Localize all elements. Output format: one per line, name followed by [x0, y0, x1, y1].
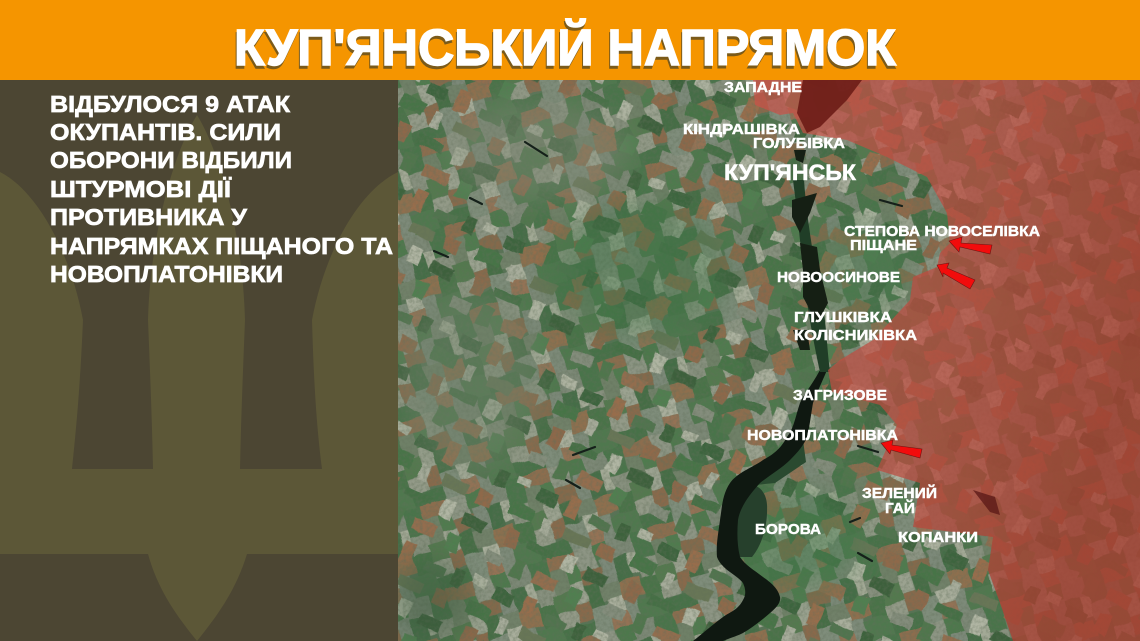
forest beside reservoir	[737, 484, 767, 557]
map labels: КІНДРАШІВКА	[683, 121, 800, 138]
map labels: ЗЕЛЕНИЙ	[862, 484, 937, 502]
map labels: ЗАГРИЗОВЕ	[793, 387, 887, 404]
panel: text background	[0, 80, 398, 641]
map labels: ГОЛУБІВКА	[753, 135, 845, 152]
gullies	[434, 142, 902, 561]
map labels: ГАЙ	[885, 499, 915, 517]
map labels	[683, 79, 1040, 546]
title: КУП'ЯНСЬКИЙ НАПРЯМОК	[234, 18, 897, 76]
map labels: ГЛУШКІВКА	[794, 309, 892, 326]
dark forest patches	[792, 150, 828, 350]
map labels: КУП'ЯНСЬК	[724, 160, 857, 185]
text block: attacks summary: ВІДБУЛОСЯ 9 АТАК	[50, 91, 291, 117]
occupied territory overlay	[753, 80, 1140, 641]
arrow: towards Pishchane	[937, 263, 975, 289]
map labels: ПІЩАНЕ	[850, 237, 917, 254]
map labels: КОПАНКИ	[898, 529, 978, 546]
trident emblem	[0, 115, 398, 641]
map labels: НОВОПЛАТОНІВКА	[747, 427, 898, 444]
map labels: КОЛІСНИКІВКА	[794, 327, 917, 344]
map labels: ЗАПАДНЕ	[724, 79, 802, 96]
text block: attacks summary: ШТУРМОВІ ДІЇ	[50, 176, 232, 202]
satellite map	[380, 60, 1140, 641]
text block: attacks summary: НАПРЯМКАХ ПІЩАНОГО ТА	[50, 233, 393, 259]
header bar	[0, 0, 1140, 80]
text block: attacks summary: ПРОТИВНИКА У	[50, 204, 247, 230]
dark red zone	[797, 80, 862, 133]
map labels: БОРОВА	[755, 521, 821, 538]
broad colour variation	[390, 100, 910, 640]
arrow: towards Novoplatonivka	[881, 440, 922, 458]
map labels: СТЕПОВА НОВОСЕЛІВКА	[844, 223, 1040, 240]
text block: attacks summary: ОКУПАНТІВ. СИЛИ	[50, 119, 281, 145]
text block: attacks summary	[50, 91, 393, 287]
river and reservoir	[693, 370, 827, 641]
arrow: towards Stepova Novoselivka	[949, 237, 992, 254]
text block: attacks summary: ОБОРОНИ ВІДБИЛИ	[50, 147, 292, 173]
map labels: НОВООСИНОВЕ	[777, 269, 900, 286]
text block: attacks summary: НОВОПЛАТОНІВКИ	[50, 261, 283, 287]
muted tint	[398, 80, 1140, 641]
